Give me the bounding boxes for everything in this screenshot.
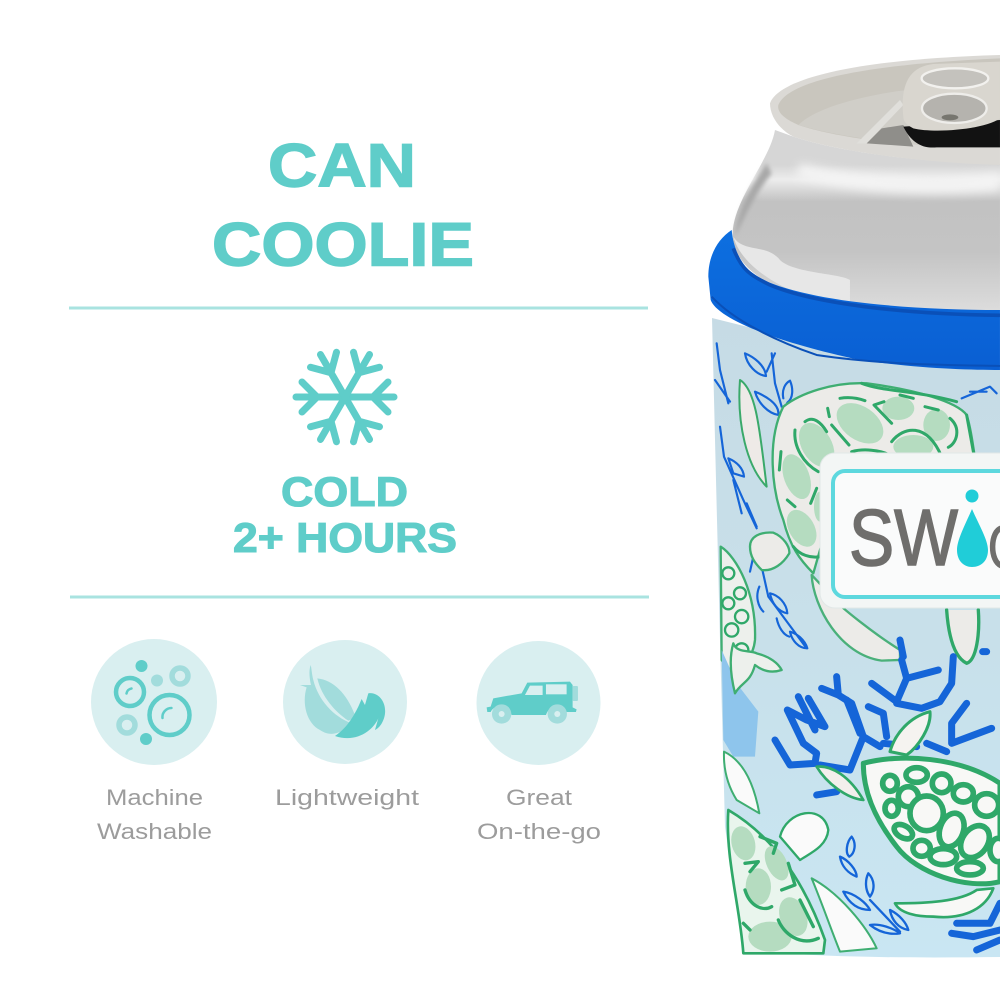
bottom-left shell (728, 810, 825, 953)
label: machine washable (97, 785, 212, 844)
label: great on-the-go: On-the-go (477, 819, 601, 844)
coolie fabric body (712, 318, 1000, 957)
icon: lightweight feather (283, 640, 407, 764)
icon: great on-the-go jeep (476, 641, 600, 765)
heading: cold 2+ hours: COLD (281, 468, 408, 515)
head (750, 533, 789, 570)
shell (773, 383, 975, 573)
logo patch: SW (849, 493, 958, 582)
upper art: sprigs and top turtle (715, 343, 997, 670)
bottom-left flipper and head (724, 752, 759, 813)
title: CAN (268, 132, 416, 200)
icon: snowflake (296, 347, 394, 447)
lower flipper (812, 575, 900, 661)
label: machine washable: Machine (106, 785, 203, 810)
heading: cold 2+ hours (233, 468, 457, 561)
right fin (947, 610, 979, 663)
heading: cold 2+ hours: 2+ HOURS (233, 514, 457, 561)
top flipper (739, 380, 767, 487)
title: COOLIE (212, 210, 474, 278)
right turtle (890, 712, 930, 755)
left-edge turtle (721, 547, 755, 670)
product photo: can in coolie (708, 55, 1000, 957)
label: machine washable: Washable (97, 819, 212, 844)
title (212, 132, 474, 278)
lower art: coral and turtles (722, 640, 1000, 953)
watercolor patch (722, 650, 758, 757)
label: great on-the-go: Great (506, 785, 572, 810)
icon: machine washable bubbles (91, 639, 217, 765)
label: lightweight: Lightweight (275, 785, 419, 810)
aluminium can (733, 55, 1000, 312)
blue coolie collar (708, 230, 1000, 370)
logo patch (820, 453, 1000, 608)
small sprig (840, 837, 908, 934)
blue sprigs (715, 343, 997, 648)
coral (775, 640, 1000, 950)
label: great on-the-go (477, 785, 601, 844)
